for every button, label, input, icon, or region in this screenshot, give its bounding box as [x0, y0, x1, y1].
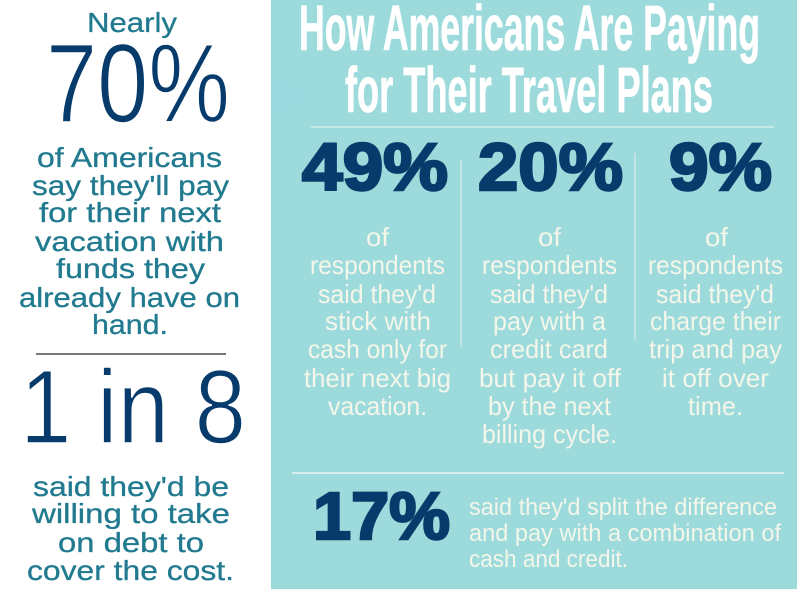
column: 20% credit card paid off: 20%: [478, 130, 623, 205]
stat: 1 in 8: 1 in 8: [20, 349, 246, 466]
panel: left white column: [0, 0, 271, 589]
text block: funds on hand: for their next: [39, 197, 221, 228]
column: 49% cash only: of: [366, 222, 390, 252]
text block: funds on hand: hand.: [92, 309, 168, 340]
column: 20% credit card paid off: respondents: [482, 250, 617, 280]
column: 9% charge over time: 9%: [669, 130, 772, 205]
callout: 17% combination: 17%: [313, 479, 450, 554]
column: 9% charge over time: respondents: [648, 250, 783, 280]
callout: 17% combination: and pay with a combination of: [469, 520, 781, 547]
column: 49% cash only: stick with: [325, 306, 431, 336]
text block: take on debt: [27, 471, 234, 586]
column: 49% cash only: respondents: [310, 250, 445, 280]
text: Nearly: Nearly: [87, 7, 177, 38]
column: 20% credit card paid off: said they'd: [490, 279, 608, 309]
heading: [299, 0, 760, 126]
column: 49% cash only: vacation.: [328, 391, 427, 421]
column: 20% credit card paid off: credit card: [490, 334, 608, 364]
column: 20% credit card paid off: but pay it off: [479, 363, 622, 393]
column: 49% cash only: [302, 130, 451, 421]
stat: 70%: 70%: [46, 21, 230, 146]
text block: funds on hand: vacation with: [35, 226, 224, 257]
text block: funds on hand: funds they: [56, 253, 205, 284]
column: 20% credit card paid off: pay with a: [493, 306, 607, 336]
panel: right teal column: [271, 0, 797, 589]
text block: take on debt: willing to take: [31, 498, 230, 529]
column: 49% cash only: 49%: [302, 130, 448, 205]
text block: funds on hand: of Americans: [37, 142, 222, 173]
column: 9% charge over time: it off over: [662, 363, 769, 393]
text block: take on debt: said they'd be: [33, 471, 229, 502]
column: 9% charge over time: of: [705, 222, 729, 252]
text block: take on debt: on debt to: [58, 527, 204, 558]
column: 9% charge over time: trip and pay: [649, 334, 782, 364]
text block: take on debt: cover the cost.: [27, 555, 234, 586]
callout: 17% combination: cash and credit.: [469, 546, 628, 573]
column: 9% charge over time: charge their: [650, 306, 781, 336]
column: 9% charge over time: time.: [688, 391, 743, 421]
callout: 17% combination: said they'd split the difference: [469, 494, 777, 521]
column: 20% credit card paid off: billing cycle.: [482, 419, 617, 449]
column: 9% charge over time: [648, 130, 783, 421]
column: 20% credit card paid off: by the next: [488, 391, 612, 421]
column: 49% cash only: their next big: [304, 363, 451, 393]
text block: funds on hand: already have on: [19, 282, 240, 313]
text block: funds on hand: say they'll pay: [32, 170, 229, 201]
column: 9% charge over time: said they'd: [656, 279, 774, 309]
column: 20% credit card paid off: [478, 130, 623, 449]
text block: funds on hand: [19, 142, 240, 340]
column: 49% cash only: said they'd: [318, 279, 436, 309]
column: 49% cash only: cash only for: [308, 334, 447, 364]
column: 20% credit card paid off: of: [538, 222, 562, 252]
callout: 17% combination: [313, 479, 781, 573]
